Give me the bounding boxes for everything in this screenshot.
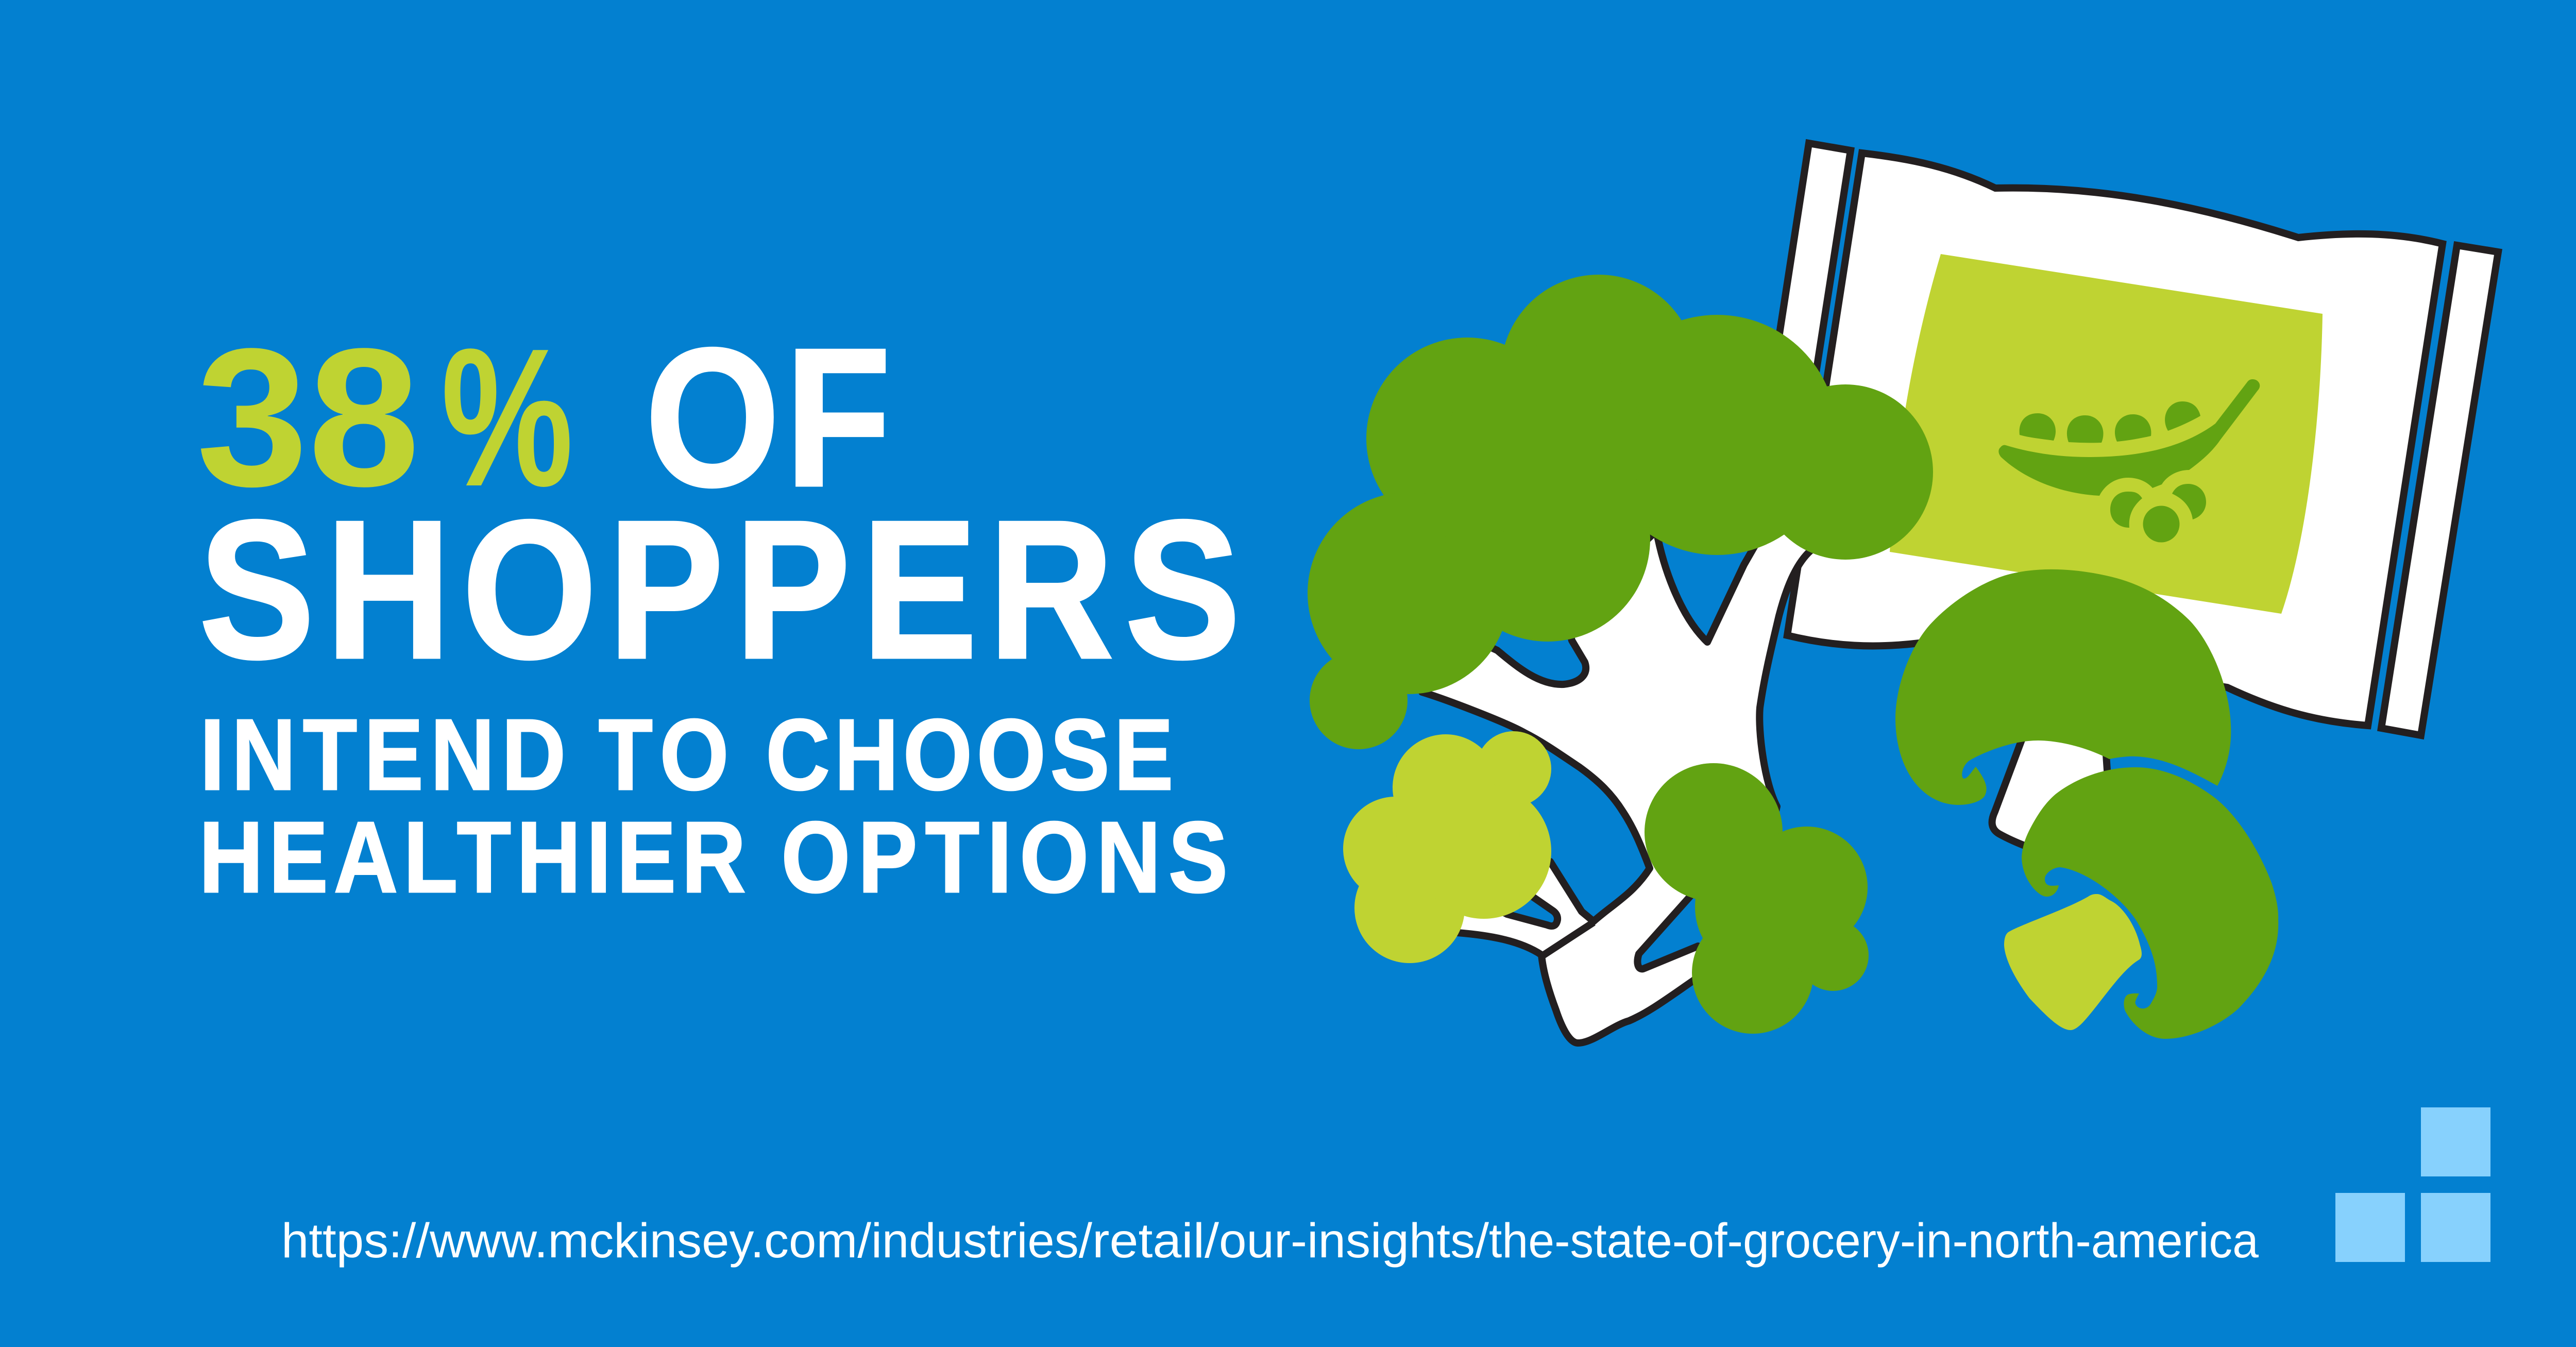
source URL: industries/ <box>871 1214 1093 1268</box>
mushroom cap: bottom <box>2022 767 2278 1039</box>
subheading line 1: CHOOSE <box>766 699 1173 811</box>
subheading line 2: OPTIONS <box>781 801 1228 914</box>
pea 6 <box>2172 484 2206 519</box>
statistic: 38%: % <box>441 307 573 527</box>
source URL: https://www.mckinsey.com/ <box>281 1214 872 1268</box>
stalk divide <box>1541 922 1594 956</box>
subheading line 1: INTEND <box>200 699 566 811</box>
mushroom cap: top <box>1895 569 2231 805</box>
lower green floret <box>1645 763 1869 1034</box>
stalk outline <box>1422 515 1811 1043</box>
illustration: broccoli <box>1308 275 1933 1043</box>
icon: pea pod <box>1998 379 2260 542</box>
source URL: the-state-of-grocery-in-north-america <box>1489 1214 2259 1268</box>
subheading line 1: TO <box>599 699 729 811</box>
subheading line 2: HEALTHIER <box>199 801 746 914</box>
pea 2 <box>2067 415 2104 443</box>
pea 3 <box>2115 414 2151 442</box>
pea 7 <box>2143 506 2179 542</box>
heading: SHOPPERS: SHOPPERS <box>199 480 1241 700</box>
heading: OF: OF <box>645 308 891 528</box>
source URL: our-insights/ <box>1219 1214 1489 1268</box>
pea 5 <box>2110 492 2142 528</box>
pea 4 <box>2165 401 2200 431</box>
bag body <box>1787 153 2443 726</box>
illustration: frozen peas bag <box>1759 143 2498 735</box>
mushroom stem <box>1992 732 2112 848</box>
light green floret <box>1343 731 1551 963</box>
pod <box>1998 379 2260 496</box>
illustration: mushrooms <box>1895 569 2278 1039</box>
bag left crimp <box>1759 143 1851 472</box>
bag label panel <box>1890 254 2323 614</box>
statistic: 38%: 38 <box>196 307 420 527</box>
mushroom stem: light green <box>2004 894 2142 1030</box>
source URL: retail/ <box>1092 1214 1219 1268</box>
bag right crimp <box>2381 245 2498 735</box>
top florets <box>1308 275 1933 749</box>
logo squares <box>2335 1107 2490 1262</box>
pea 1 <box>2020 413 2056 441</box>
broccoli stalk <box>1422 515 1811 1043</box>
headline <box>196 307 1241 914</box>
